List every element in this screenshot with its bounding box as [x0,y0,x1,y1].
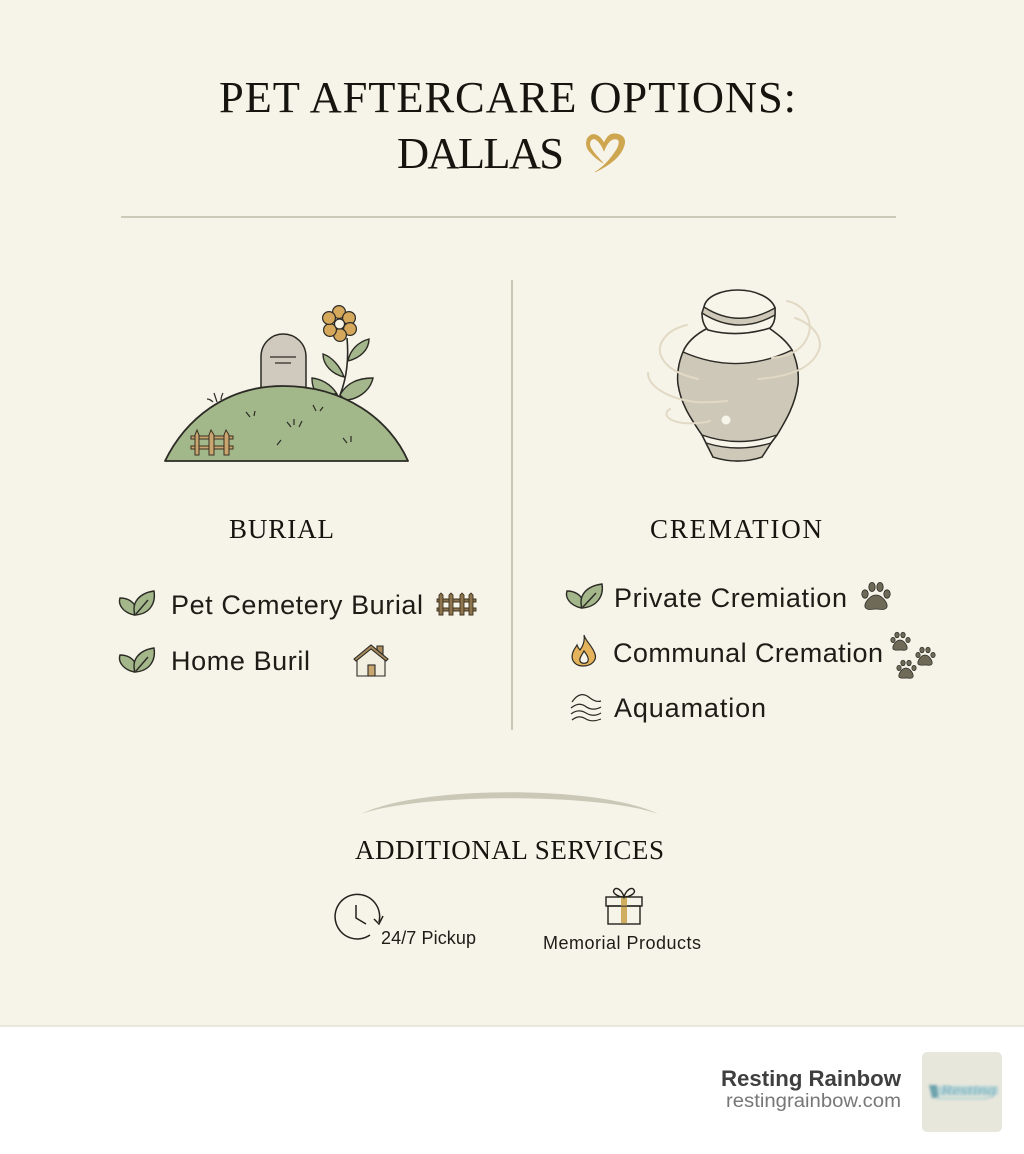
footer brand name: Resting Rainbow [721,1066,901,1091]
list item: home burial: Home Buril [171,646,310,676]
title [219,72,796,178]
list item: pet cemetery burial: Pet Cemetery Burial [171,590,423,620]
illustration: cremation urn [648,290,820,461]
heading: burial: BURIAL [229,514,334,544]
heading: cremation: CREMATION [650,514,822,544]
list item: aquamation: Aquamation [614,693,766,723]
service: 24/7 pickup [335,894,476,948]
icon: fence [437,593,476,615]
list item: communal cremation [572,632,935,678]
icon: house [354,645,388,676]
icon: flame [572,635,595,666]
grass tufts [207,393,351,445]
icon: leaf [120,648,154,672]
icon: leaf [120,591,154,615]
icon: clock [335,894,383,939]
footer logo [922,1052,1002,1132]
service: memorial products: Memorial Products [543,933,701,953]
urn lid [702,290,775,334]
title: PET AFTERCARE OPTIONS: [219,72,796,122]
icon: water waves [571,695,601,721]
illustration: burial hill [165,306,408,461]
list item: private cremation: Private Cremiation [614,583,847,613]
footer url: restingrainbow.com [726,1091,901,1112]
flower stem and leaves [312,306,373,400]
decorative arc [361,792,658,814]
icon: paw [862,582,890,610]
footer logo: Resting [940,1083,997,1099]
icon: gold heart [586,134,625,172]
hill [165,386,408,461]
title: DALLAS [397,128,564,178]
icon: three paws [891,632,935,678]
service: memorial products [543,888,701,953]
icon: gift box [606,888,642,924]
heading: additional services: ADDITIONAL SERVICES [355,835,664,865]
small fence [191,430,233,455]
service: 24/7 pickup: 24/7 Pickup [381,928,476,948]
list item: home burial [120,645,388,676]
tombstone [261,334,306,389]
list item: communal cremation: Communal Cremation [613,638,883,668]
swirling lines [648,301,820,423]
icon: leaf [567,584,602,608]
